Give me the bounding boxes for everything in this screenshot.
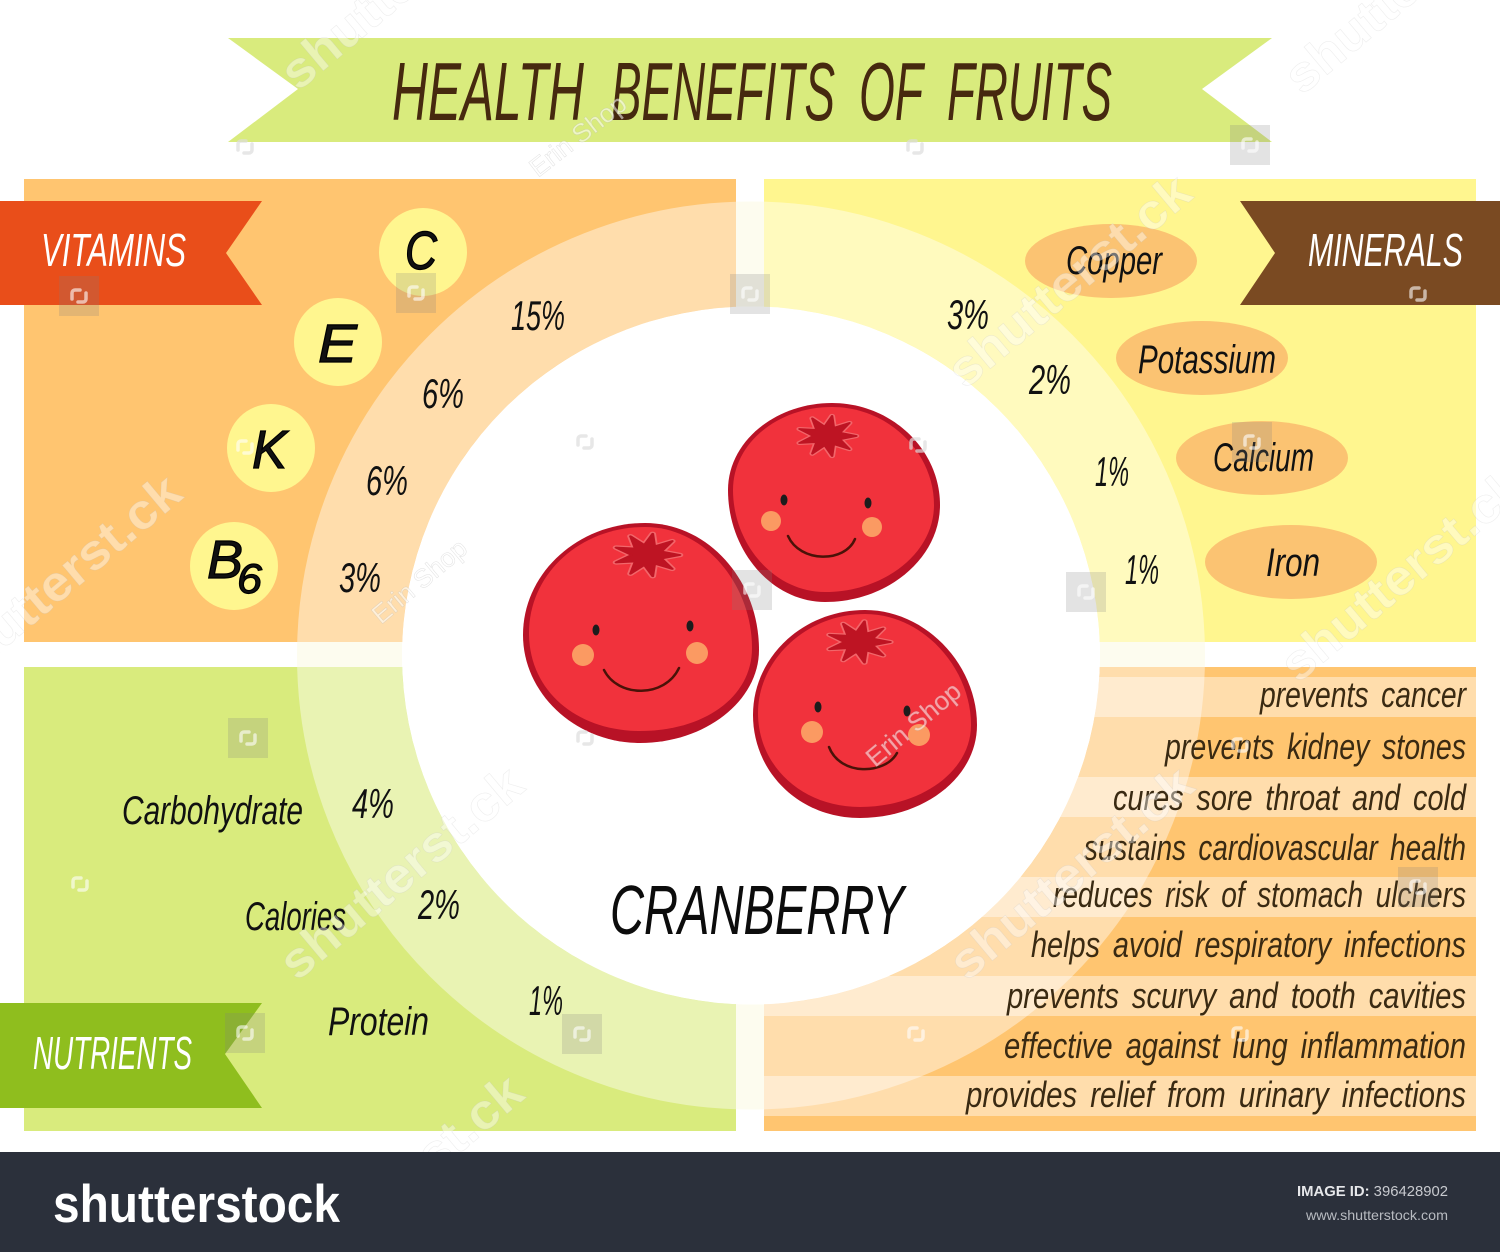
nutrient list: Carbohydrate: [122, 789, 303, 833]
mineral percentages: 2%: [1028, 356, 1071, 403]
vitamin K: K: [252, 420, 289, 480]
benefits text list: [965, 674, 1468, 1115]
vitamin B6: B: [207, 530, 243, 590]
mineral: iron: Iron: [1266, 541, 1320, 585]
faint ring visible in the gaps: [350, 254, 1152, 1057]
stock watermark overlays: shutterst.ck: [268, 755, 534, 990]
cranberry illustration: bottom berry: [753, 610, 977, 818]
footer bar: [0, 1152, 1500, 1252]
panel: minerals background: [764, 179, 1476, 642]
vitamin percentages: 3%: [339, 554, 381, 601]
mineral: calcium: [1176, 421, 1348, 495]
vitamin B6: [190, 522, 278, 610]
vitamins ribbon: VITAMINS: [41, 224, 186, 276]
vitamin percentages: 6%: [366, 457, 408, 504]
vitamin E: E: [318, 314, 358, 374]
translucent ring: [297, 202, 1205, 1110]
vitamins ribbon: [0, 201, 262, 305]
title banner: OF: [859, 45, 925, 138]
nutrients ribbon: NUTRIENTS: [33, 1027, 192, 1079]
title banner: HEALTH: [392, 45, 585, 138]
mineral: calcium: Calcium: [1213, 436, 1314, 480]
vitamin B6: 6: [237, 555, 263, 602]
panel: vitamins background: [24, 179, 736, 642]
vitamin percentages: 6%: [422, 370, 464, 417]
vitamin C: [379, 208, 467, 296]
mineral percentages: [947, 291, 1159, 593]
mineral: potassium: Potassium: [1138, 338, 1276, 382]
mineral: iron: [1205, 525, 1377, 599]
cranberry illustration: top berry: [728, 403, 940, 602]
vitamin list: [190, 208, 467, 610]
mineral list: [1025, 224, 1377, 599]
nutrient list: [122, 780, 563, 1044]
website: www.shutterstock.com: [1305, 1207, 1448, 1223]
title banner: BENEFITS: [611, 45, 835, 138]
minerals ribbon: [1240, 201, 1500, 305]
mineral percentages: 3%: [947, 291, 989, 338]
stock watermark overlays: Erin Shop: [860, 676, 967, 773]
panel: nutrients background: [24, 667, 736, 1131]
vitamin C: C: [405, 221, 438, 281]
stock watermark overlays: shutterst.ck: [938, 755, 1204, 990]
nutrient list: Calories: [245, 895, 346, 939]
mineral: copper: [1025, 224, 1197, 298]
title banner: FRUITS: [947, 45, 1112, 138]
nutrient list: Protein: [328, 1000, 429, 1044]
central white circle: [402, 306, 1100, 1004]
title banner: [228, 38, 1272, 142]
mineral percentages: 1%: [1095, 448, 1129, 495]
cranberry illustration: left berry: [523, 523, 759, 743]
nutrient list: 1%: [529, 977, 563, 1024]
mineral: potassium: [1116, 321, 1288, 395]
footer logo: shutterstock: [53, 1175, 340, 1234]
fruit name: CRANBERRY: [610, 871, 907, 949]
nutrient list: 2%: [417, 881, 460, 928]
stock watermark overlays: Erin Shop: [366, 533, 473, 630]
nutrient list: 4%: [352, 780, 394, 827]
mineral: copper: Copper: [1066, 239, 1163, 283]
nutrients ribbon: [0, 1003, 262, 1108]
panel: benefits striped background: [764, 667, 1476, 1131]
vitamin E: [294, 298, 382, 386]
stock watermark overlays: Erin Shop: [523, 88, 632, 183]
mineral percentages: 1%: [1125, 546, 1159, 593]
vitamin percentages: [339, 292, 565, 601]
stock watermark overlays: shutterst.ck: [936, 163, 1202, 398]
vitamin percentages: 15%: [511, 292, 565, 339]
image id: IMAGE ID: 396428902: [1297, 1183, 1448, 1200]
vitamin K: [227, 404, 315, 492]
